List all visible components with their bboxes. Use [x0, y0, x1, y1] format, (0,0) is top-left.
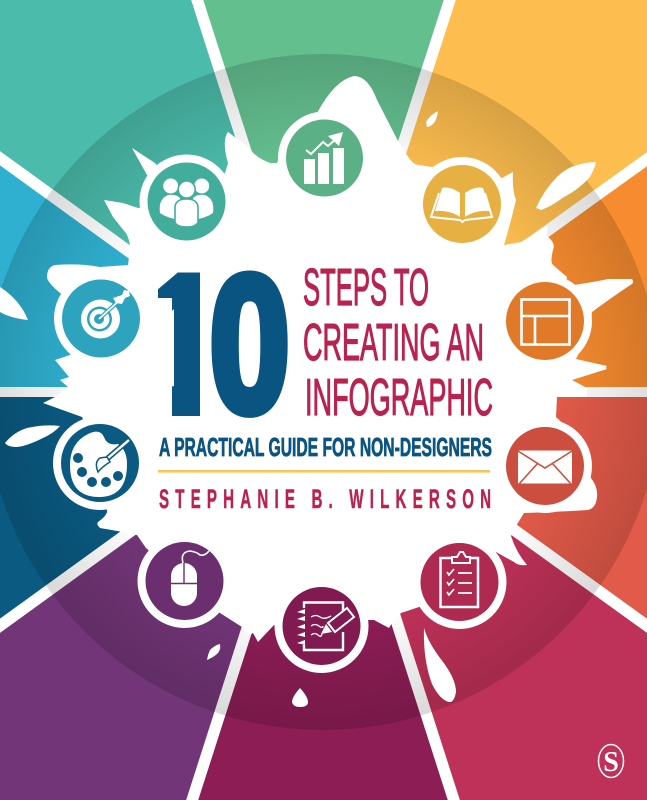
- icon: envelope: [506, 427, 584, 505]
- numeral 10: [158, 270, 288, 418]
- wedge: blue: [0, 158, 323, 392]
- icon: target with arrow: [62, 280, 140, 358]
- icon: bar chart with arrow: [286, 120, 363, 196]
- icon: clipboard checklist: [420, 543, 498, 621]
- white paint splash: [0, 76, 633, 707]
- icon: people: [148, 162, 226, 240]
- wedge: red: [323, 392, 647, 626]
- gold divider: [158, 470, 490, 473]
- publisher logo: [598, 744, 624, 778]
- author name: STEPHANIE B. WILKERSON: [159, 483, 491, 514]
- title: Steps to Creating an Infographic: CREATING AN: [303, 314, 484, 372]
- icon: computer mouse: [146, 542, 224, 620]
- title: Steps to Creating an Infographic: [303, 259, 493, 427]
- wedge: teal: [0, 0, 323, 392]
- icon: page layout: [506, 282, 584, 360]
- wedge: navy: [0, 392, 323, 626]
- title: Steps to Creating an Infographic: STEPS TO: [303, 259, 429, 317]
- wedge: orange: [323, 159, 647, 392]
- wedge: yellow: [323, 0, 647, 392]
- wedge: wine: [192, 392, 454, 800]
- icon: paint palette: [61, 424, 139, 502]
- numeral 10: 1: [143, 235, 226, 452]
- wedge: rose: [323, 392, 647, 800]
- icon: open book: [423, 165, 501, 243]
- wedge: purple: [0, 392, 323, 800]
- publisher logo: S: [603, 747, 619, 778]
- numeral 10: 0: [210, 236, 290, 453]
- wedge: green: [197, 0, 450, 392]
- icon: writing notepad: [282, 587, 360, 665]
